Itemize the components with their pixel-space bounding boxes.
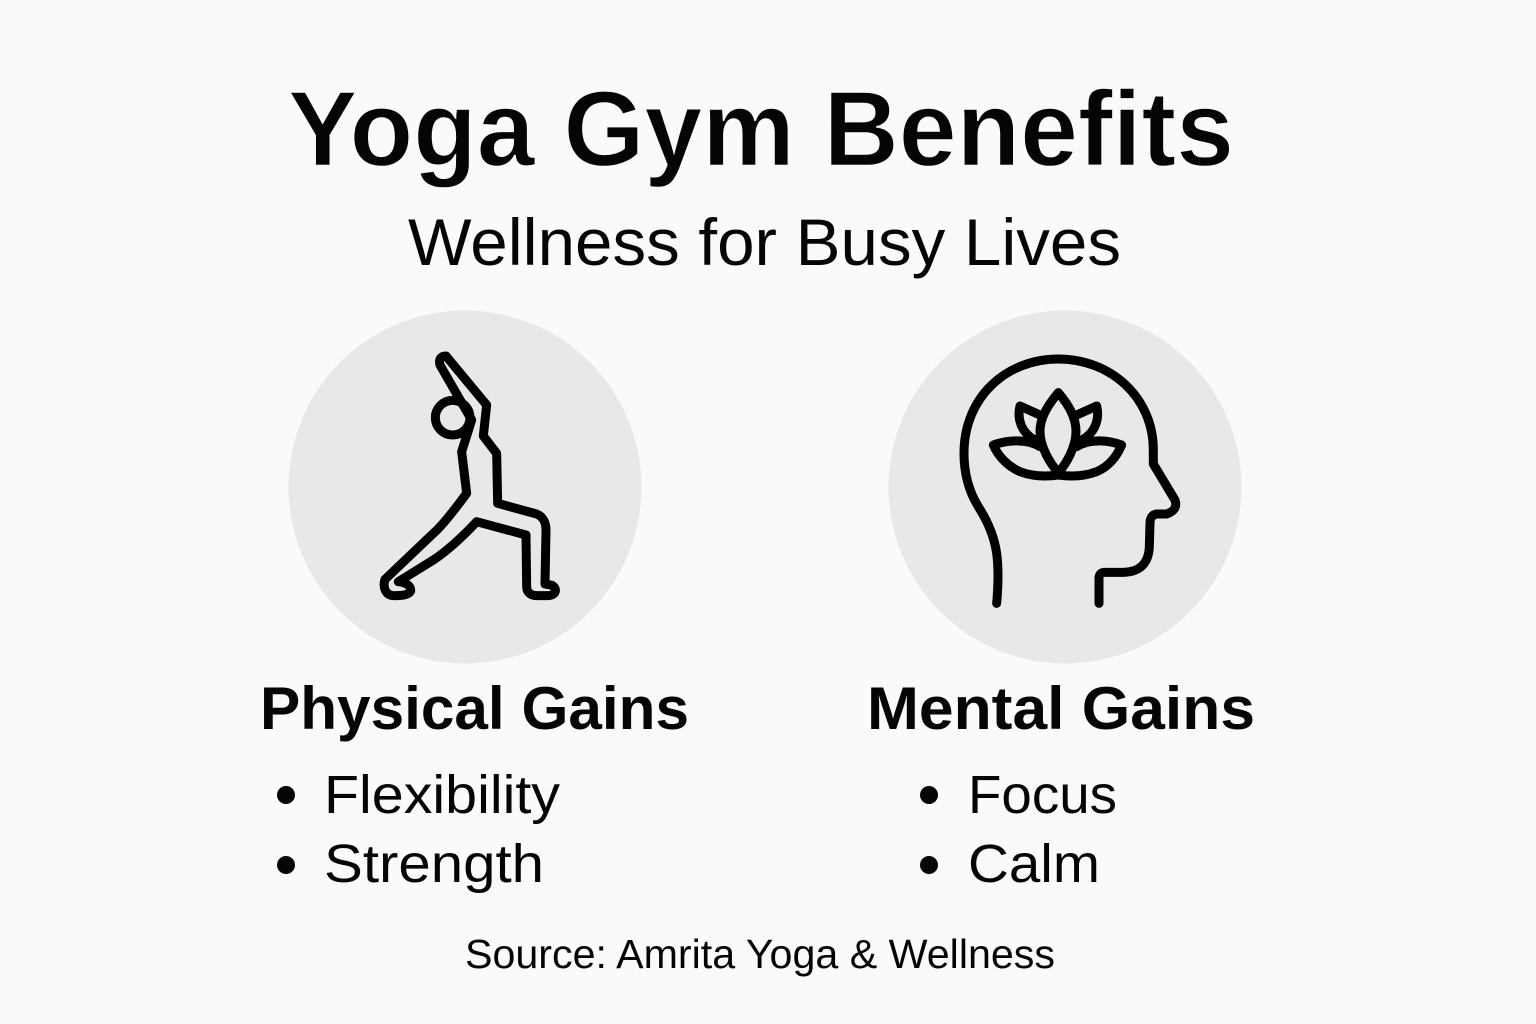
list: mental gains: Calm [968,834,1100,894]
heading: physical gains: Physical Gains [260,675,689,742]
panel: physical gains [260,310,689,894]
list: physical gains: Strength [324,834,544,894]
heading: mental gains: Mental Gains [867,675,1255,742]
subtitle: Wellness for Busy Lives [408,205,1121,279]
icon background: physical [288,310,642,664]
icon: yoga warrior pose [384,356,555,596]
list: physical gains: Flexibility [324,765,560,825]
icon background: mental [888,310,1242,664]
list: mental gains: Focus [968,765,1117,825]
title: Yoga Gym Benefits [288,68,1234,188]
panel: mental gains [867,310,1255,894]
list: physical gains [277,765,560,894]
icon: head with lotus [964,359,1176,603]
source: Source: Amrita Yoga & Wellness [465,931,1055,977]
list: mental gains [920,765,1117,894]
